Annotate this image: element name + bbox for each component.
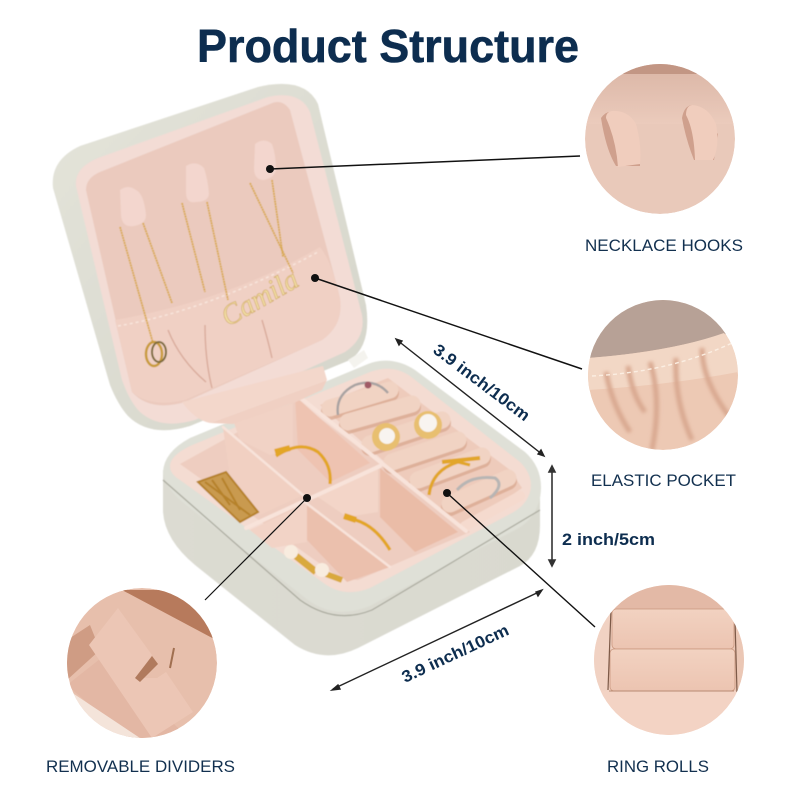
pocket gathers [118, 252, 318, 388]
left divider face [223, 428, 303, 515]
necklaces [120, 180, 293, 343]
cross divider right face [315, 467, 378, 517]
title: Product Structure [197, 20, 579, 72]
lid rim [76, 95, 363, 424]
clasp [348, 350, 368, 368]
heart pendant [146, 342, 166, 366]
dimension label: depth: 3.9 inch/10cm [430, 341, 533, 425]
name charm: Camila [216, 263, 304, 333]
leader: removable dividers [205, 494, 311, 600]
strap [182, 366, 327, 423]
leader: elastic pocket [311, 274, 582, 369]
ring rolls in tray [330, 390, 508, 507]
necklace hooks [120, 140, 276, 226]
label: necklace hooks: NECKLACE HOOKS [585, 236, 743, 255]
silver and gold top rings [338, 382, 499, 498]
circle: necklace hooks detail [585, 64, 735, 214]
leader: ring rolls [443, 489, 595, 627]
lid outer shell [53, 84, 367, 430]
height dimension arrow [549, 466, 555, 566]
elastic pocket [115, 247, 341, 403]
dimension label: height: 2 inch/5cm [562, 531, 655, 549]
main divider right face [380, 468, 458, 552]
label: removable dividers: REMOVABLE DIVIDERS [46, 757, 235, 776]
gold rings [275, 447, 390, 550]
pearl earrings [284, 411, 442, 580]
divider top edges [223, 394, 466, 567]
label: ring rolls: RING ROLLS [607, 757, 709, 776]
top dimension arrow [396, 339, 544, 456]
label: elastic pocket: ELASTIC POCKET [591, 471, 736, 490]
circle: ring rolls detail [594, 585, 745, 736]
jewelry box base [163, 361, 541, 655]
gold brooch [198, 472, 258, 522]
lid inner panel [86, 102, 339, 405]
bottom dimension arrow [332, 590, 542, 690]
tray interior [170, 369, 531, 592]
jewelry box lid [53, 84, 368, 430]
leader: necklace hooks [266, 156, 580, 173]
front left divider face [307, 505, 390, 582]
main divider face [295, 396, 370, 482]
base rim [163, 361, 541, 612]
base side wall [163, 470, 540, 655]
back wall of middle compartments [233, 403, 293, 455]
circle: removable dividers detail [67, 588, 217, 740]
dimension label: width: 3.9 inch/10cm [399, 621, 512, 687]
circle: elastic pocket detail [588, 300, 738, 450]
tray floor [180, 400, 470, 580]
cross divider left face [250, 503, 307, 548]
